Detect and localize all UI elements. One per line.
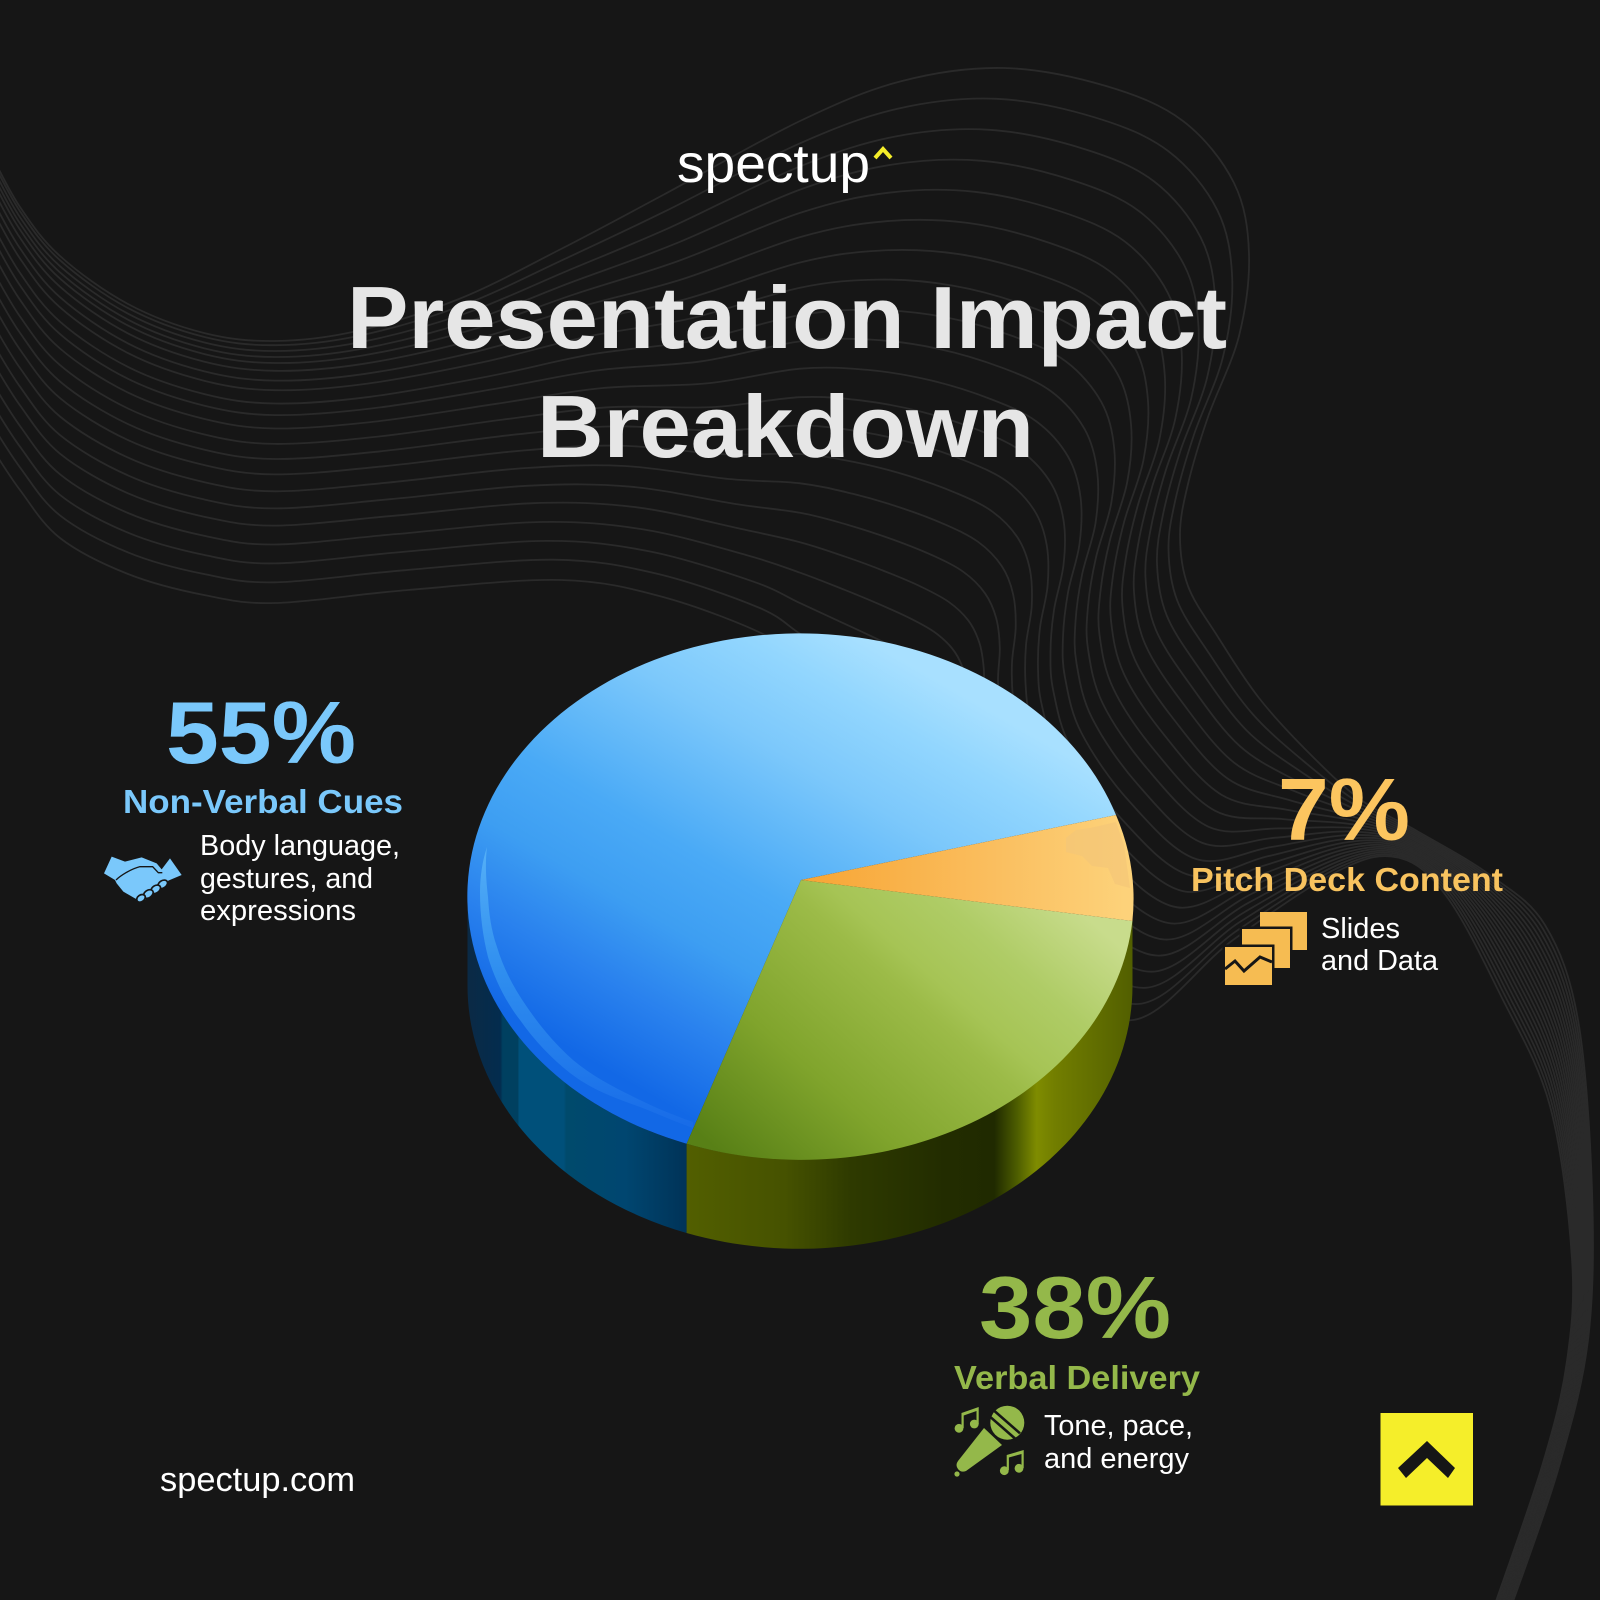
icon: handshake — [104, 857, 182, 904]
callout: 38% verbal delivery — [954, 1258, 1201, 1477]
percentage: 55% — [166, 683, 356, 782]
description — [1321, 913, 1438, 977]
description: gestures, and — [200, 863, 373, 895]
pie side: blue — [468, 897, 687, 1233]
pie slice: 38% green — [687, 880, 1132, 1160]
label: Non-Verbal Cues — [123, 783, 403, 820]
title — [347, 268, 1227, 476]
logo: spectup: spectup — [677, 134, 870, 194]
description: Body language, — [200, 830, 400, 862]
label: Verbal Delivery — [954, 1359, 1201, 1396]
pie slice highlight — [480, 847, 693, 1128]
pie side: green — [687, 897, 1132, 1249]
title: Breakdown — [537, 377, 1034, 476]
description: Slides — [1321, 913, 1400, 945]
icon: microphone with notes — [954, 1406, 1024, 1477]
description — [200, 830, 400, 927]
description: and Data — [1321, 945, 1438, 977]
pie slice: 55% blue — [467, 633, 1116, 1144]
callout: 7% pitch deck content — [1191, 760, 1503, 988]
percentage: 38% — [979, 1258, 1171, 1357]
chart: 3D pie — [467, 633, 1134, 1249]
label: Pitch Deck Content — [1191, 861, 1503, 898]
description: Tone, pace, — [1044, 1410, 1193, 1442]
percentage: 7% — [1278, 760, 1410, 859]
description: expressions — [200, 895, 356, 927]
pie slice: 7% orange — [801, 815, 1134, 921]
description — [1044, 1410, 1193, 1475]
badge: yellow arrow — [1380, 1413, 1473, 1506]
description: and energy — [1044, 1443, 1190, 1475]
website url: spectup.com — [160, 1461, 355, 1499]
icon: slides — [1222, 912, 1307, 988]
title: Presentation Impact — [347, 268, 1227, 367]
callout: 55% non-verbal cues — [104, 683, 403, 927]
